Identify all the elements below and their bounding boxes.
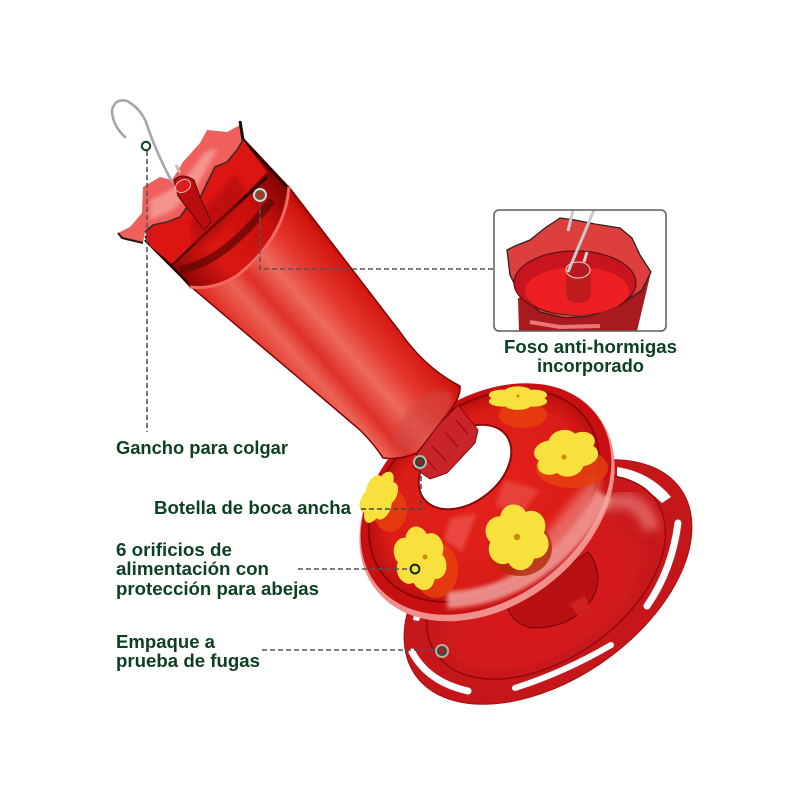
label: feeding ports: protección para abejas xyxy=(116,579,319,599)
bottle xyxy=(112,100,478,479)
flower: lower left xyxy=(390,522,450,594)
label: ant moat: Foso anti-hormigas xyxy=(504,337,677,357)
collar band xyxy=(145,138,289,288)
label: wide-mouth bottle: Botella de boca ancha xyxy=(154,498,352,518)
inset frame xyxy=(494,210,666,331)
inset interior xyxy=(507,210,651,331)
inset: ant moat xyxy=(494,210,666,331)
label: feeding ports xyxy=(116,540,319,599)
marker: moat xyxy=(253,188,267,202)
marker: gasket xyxy=(435,644,449,658)
label: ant moat: incorporado xyxy=(537,356,644,376)
bottle neck xyxy=(413,405,478,479)
leader lines xyxy=(147,151,494,650)
flower: front xyxy=(482,499,553,575)
flower: left xyxy=(353,465,405,529)
scalloped inner wall xyxy=(145,140,267,264)
feeding disk xyxy=(313,335,661,670)
label: ant moat xyxy=(504,337,677,376)
label: gasket: Empaque a xyxy=(116,632,216,652)
stem under the feeding disk xyxy=(507,552,598,628)
mounting hole xyxy=(402,407,528,527)
label: feeding ports: 6 orificios de xyxy=(116,540,232,560)
flower: right xyxy=(530,422,602,484)
flower: top xyxy=(489,386,547,410)
marker: mouth xyxy=(413,455,427,469)
marker: ports xyxy=(411,565,419,573)
base tray with perch ring xyxy=(360,410,736,754)
marker: hook xyxy=(142,142,150,150)
hanging hook xyxy=(112,100,172,182)
label: feeding ports: alimentación con xyxy=(116,559,269,579)
flower ports xyxy=(422,394,566,560)
hook post xyxy=(176,165,180,173)
label: hanging hook: Gancho para colgar xyxy=(116,438,288,458)
label: gasket: prueba de fugas xyxy=(116,651,260,671)
bottle body xyxy=(190,187,460,458)
label: gasket xyxy=(116,632,260,671)
flower shadows xyxy=(373,402,608,598)
back flare xyxy=(118,125,243,243)
